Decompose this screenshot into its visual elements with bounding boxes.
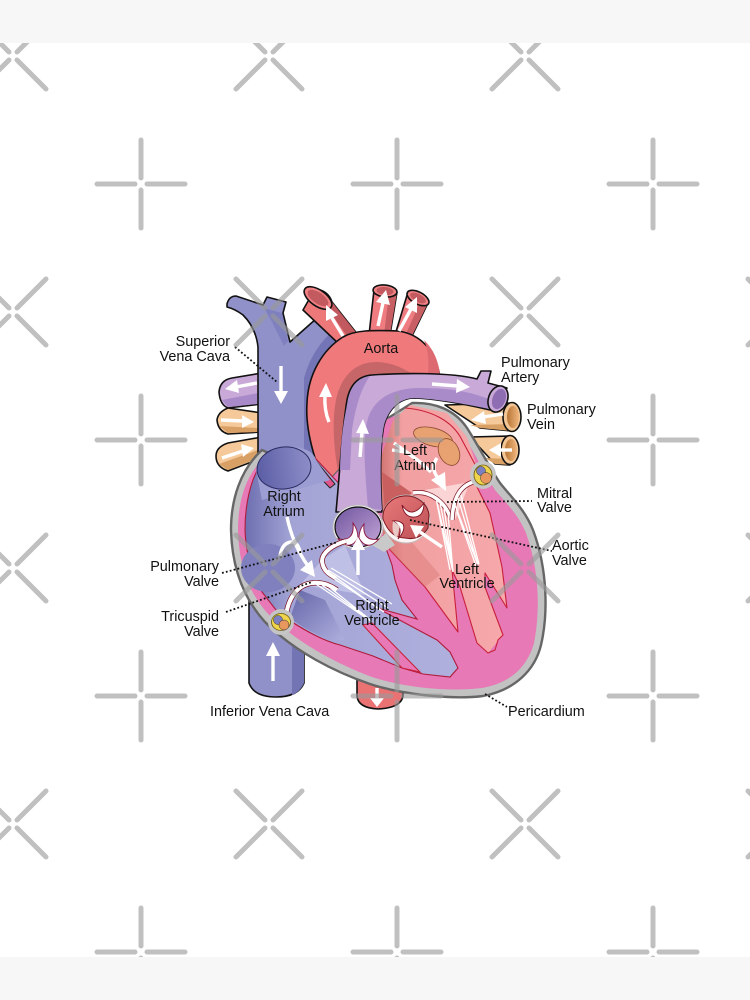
label: Left Atrium: Atrium bbox=[394, 458, 436, 474]
arrow: superior vena cava bbox=[274, 366, 288, 404]
pink strip at atrial wall bbox=[305, 456, 335, 488]
dotted leader lines bbox=[222, 347, 552, 707]
vessel: right pulmonary veins bbox=[445, 402, 521, 465]
label: Pulmonary Artery: Pulmonary bbox=[501, 355, 570, 371]
arrow: descending aorta bbox=[370, 688, 384, 707]
label: Superior Vena Cava: Superior bbox=[176, 334, 230, 350]
arrow: aortic valve bbox=[410, 525, 442, 547]
connective tissue between valves bbox=[372, 533, 395, 552]
arrow: lower left vein bbox=[222, 444, 254, 458]
label: Right Ventricle: Right bbox=[355, 598, 389, 614]
label: Pulmonary Valve: Pulmonary bbox=[150, 559, 219, 575]
left atrium upper wall bbox=[405, 408, 478, 470]
label: Aortic Valve: Valve bbox=[552, 553, 587, 569]
arrow: pulmonary artery right bbox=[432, 379, 470, 393]
top band bbox=[0, 0, 750, 43]
right chambers bbox=[245, 458, 458, 677]
arrow: pulmonary valve bbox=[351, 537, 365, 575]
arrow: left atrium left bbox=[392, 443, 431, 472]
vessel: left pulmonary artery branch bbox=[219, 373, 262, 408]
arrow: hook in right atrium bbox=[280, 542, 300, 556]
arrow: aorta branch middle bbox=[376, 290, 390, 326]
label: Right Atrium: Right bbox=[267, 489, 301, 505]
label: Mitral Valve: Valve bbox=[537, 500, 572, 516]
label: Pulmonary Artery: Artery bbox=[501, 370, 540, 386]
coronary sinus opening bbox=[241, 544, 295, 592]
label: Pericardium: Pericardium bbox=[508, 704, 585, 720]
valve: mitral bbox=[413, 481, 479, 572]
arrow: aorta branch right bbox=[399, 297, 417, 331]
label: Superior Vena Cava: Vena Cava bbox=[160, 349, 230, 365]
valve: aortic bbox=[382, 495, 430, 543]
superior vena cava opening bbox=[254, 443, 330, 500]
vessel: superior vena cava bbox=[227, 296, 342, 458]
label: Inferior Vena Cava: Inferior Vena Cava bbox=[210, 704, 329, 720]
arrow: aorta branch left bbox=[326, 305, 343, 336]
label: Pulmonary Vein: Vein bbox=[527, 417, 555, 433]
vessel: left pulmonary vein upper bbox=[217, 408, 262, 434]
arrow: inferior vena cava bbox=[266, 642, 280, 681]
top band overlay bbox=[0, 0, 750, 43]
arrow: left atrium to mitral bbox=[431, 458, 446, 491]
chordae: tricuspid bbox=[316, 568, 392, 622]
pulmonary vein openings in left atrium bbox=[411, 423, 464, 469]
label: Pulmonary Vein: Pulmonary bbox=[527, 402, 596, 418]
vessel: aortic arch bbox=[307, 331, 441, 510]
node: sinoatrial left bbox=[470, 461, 496, 489]
arrow: right atrium flow bbox=[287, 517, 315, 577]
myocardium bbox=[238, 409, 538, 690]
label: Left Atrium: Left bbox=[403, 443, 427, 459]
pericardium bbox=[231, 403, 546, 697]
label: Left Ventricle: Left bbox=[455, 562, 479, 578]
valve: pulmonary bbox=[333, 505, 383, 549]
node: right coronary bbox=[268, 609, 294, 635]
pale tricuspid region bbox=[300, 545, 365, 595]
label: Left Ventricle: Ventricle bbox=[439, 576, 495, 592]
arrow: pulmonary trunk bbox=[356, 419, 369, 457]
arrow: upper left vein bbox=[221, 415, 254, 428]
heart body bbox=[231, 403, 546, 697]
bottom band bbox=[0, 957, 750, 1000]
vessel: descending aorta stub bbox=[357, 670, 403, 709]
vessel: pulmonary trunk bbox=[336, 371, 512, 512]
vessel: aortic branches bbox=[300, 282, 431, 345]
arrow: right vein upper bbox=[471, 411, 503, 424]
shaded root below aortic valve bbox=[385, 540, 440, 587]
label: Right Ventricle: Ventricle bbox=[344, 613, 400, 629]
label: Right Atrium: Atrium bbox=[263, 504, 305, 520]
arrow: right vein lower bbox=[489, 443, 512, 457]
pale mitral region bbox=[425, 482, 470, 520]
pink finger in ventricle bbox=[363, 623, 420, 672]
left chambers bbox=[380, 405, 507, 653]
chordae: mitral bbox=[436, 495, 479, 572]
label: Tricuspid Valve: Tricuspid bbox=[161, 609, 219, 625]
label: Aortic Valve: Aortic bbox=[552, 538, 589, 554]
aortic root shadow bbox=[382, 472, 412, 515]
valve: tricuspid bbox=[286, 541, 392, 622]
label: Pulmonary Valve: Valve bbox=[184, 574, 219, 590]
arrow: ascending aorta bbox=[319, 383, 332, 422]
label: Tricuspid Valve: Valve bbox=[184, 624, 219, 640]
label: Aorta: Aorta bbox=[364, 341, 398, 357]
shaded lower right ventricle bbox=[290, 590, 345, 640]
arrow: left branch bbox=[225, 380, 257, 393]
label: Mitral Valve: Mitral bbox=[537, 486, 572, 502]
vessel: inferior vena cava bbox=[249, 590, 304, 697]
vessel: left pulmonary vein lower bbox=[216, 437, 262, 471]
